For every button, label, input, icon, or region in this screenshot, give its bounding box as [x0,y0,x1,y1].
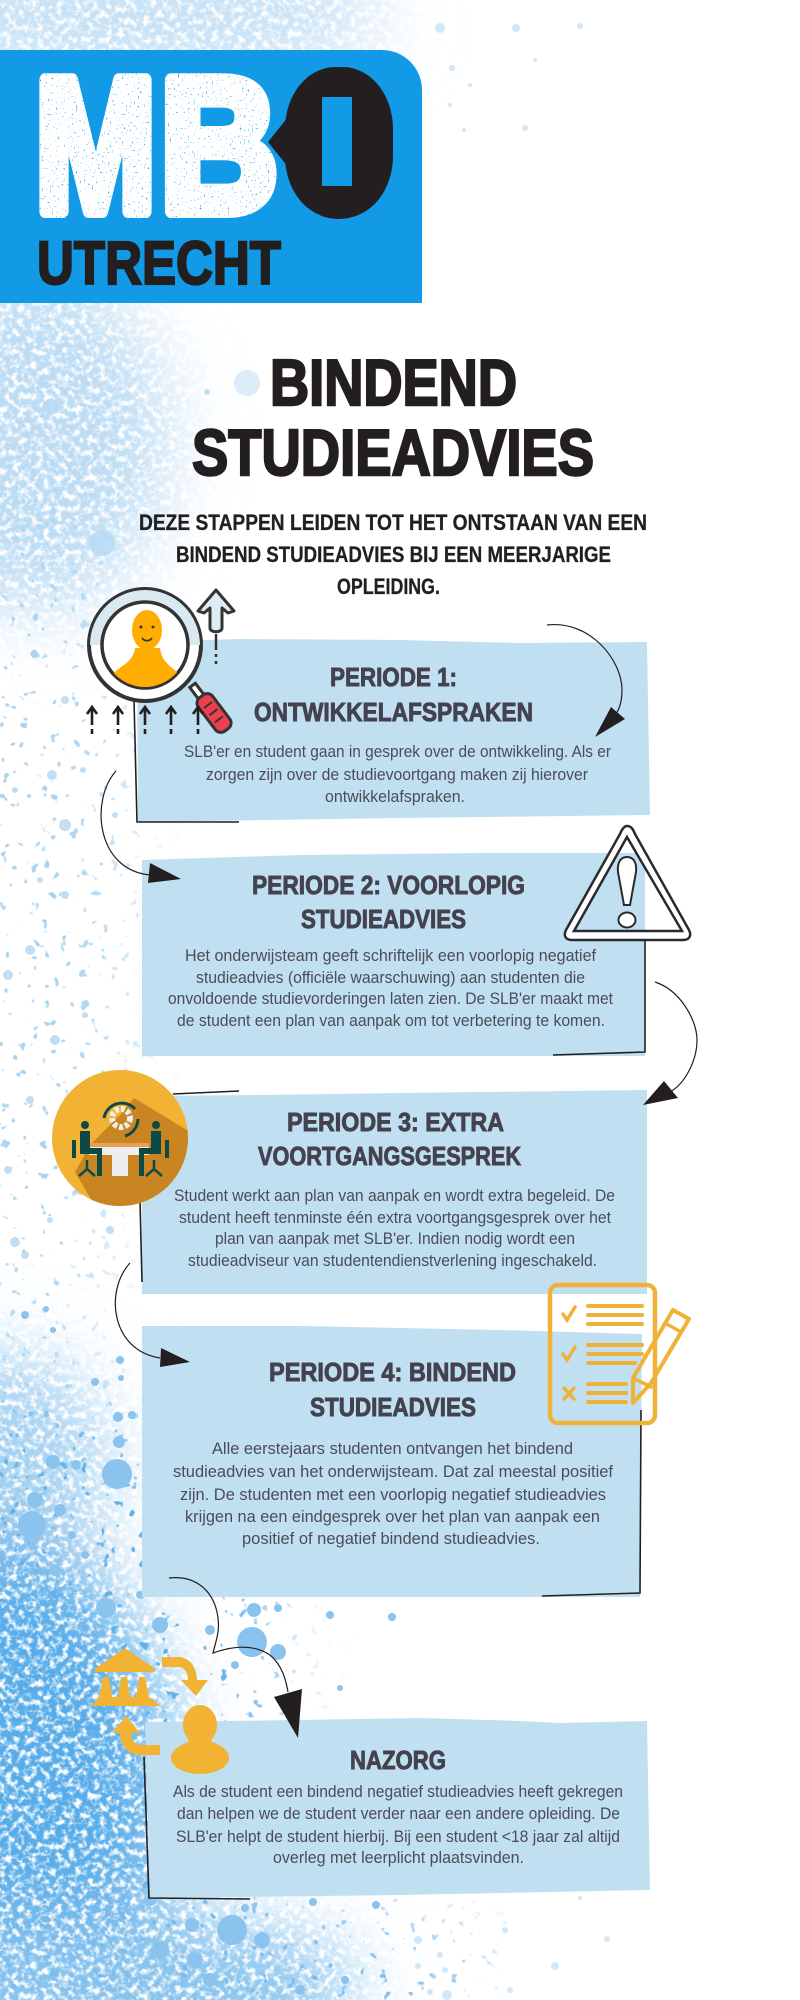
icon: warning triangle [565,826,690,940]
heading: periode 1 [254,662,533,727]
logo word Utrecht: UTRECHT [37,229,281,297]
arrow: to nazorg [169,1578,302,1738]
text: periode 4: zijn. De studenten met een voorlopig negatief studieadvies [180,1485,606,1504]
subtitle [139,510,647,599]
text: nazorg: SLB'er helpt de student hierbij. Bij een student <18 jaar zal altijd [176,1827,620,1846]
text: periode 3 [174,1186,615,1270]
logo: MBO Utrecht [0,33,422,303]
text: periode 1: ontwikkelafspraken. [325,787,465,806]
text: periode 2 [168,946,613,1030]
icon: magnifier with student [87,589,234,735]
text: nazorg [173,1782,623,1867]
panel: periode 3 [140,1090,647,1294]
heading: nazorg: NAZORG [350,1745,446,1775]
heading: periode 4 [269,1357,516,1422]
text: nazorg: overleg met leerplicht plaatsvinden. [273,1848,524,1867]
heading: periode 4: STUDIEADVIES [310,1392,476,1422]
text: periode 4: krijgen na een eindgesprek over het plan van aanpak een [185,1507,600,1526]
arrow: to periode 4 [115,1263,190,1367]
heading: periode 2: PERIODE 2: VOORLOPIG [252,870,525,900]
text: periode 1: SLB'er en student gaan in gesprek over de ontwikkeling. Als er [184,742,611,761]
logo letter B: B [160,40,278,252]
text: periode 2: Het onderwijsteam geeft schriftelijk een voorlopig negatief [185,946,596,965]
title: STUDIEADVIES [192,416,594,489]
title [192,346,594,489]
panel: periode 1 [134,639,650,822]
arrow: to periode 3 [643,982,697,1105]
heading: periode 3: VOORTGANGSGESPREK [258,1141,521,1171]
text: periode 1: zorgen zijn over de studievoortgang maken zij hierover [206,765,588,784]
heading: periode 3 [258,1107,521,1171]
panel: nazorg [144,1718,650,1899]
subtitle: OPLEIDING. [337,574,440,599]
big up arrow [198,590,234,668]
heading: periode 2: STUDIEADVIES [301,904,466,934]
heading: periode 4: PERIODE 4: BINDEND [269,1357,516,1387]
heading: periode 2 [252,870,525,934]
arrow: to periode 2 [101,771,181,883]
text: periode 3: plan van aanpak met SLB'er. Indien nodig wordt een [215,1229,575,1248]
text: nazorg: Als de student een bindend negatief studieadvies heeft gekregen [173,1782,623,1801]
student [183,1705,217,1745]
faint blot left of title [234,370,260,396]
logo letter M: M [35,40,156,252]
heading: periode 1: PERIODE 1: [330,662,457,692]
text: periode 1 [184,742,611,806]
text: periode 3: studieadviseur van studentendienstverlening ingeschakeld. [188,1251,597,1270]
icon: meeting at table [52,1070,188,1206]
text: periode 4: Alle eerstejaars studenten ontvangen het bindend [212,1439,573,1458]
text: periode 2: studieadvies (officiële waarschuwing) aan studenten die [196,968,585,987]
heading: periode 3: PERIODE 3: EXTRA [287,1107,504,1137]
small up arrows [87,707,203,734]
subtitle: DEZE STAPPEN LEIDEN TOT HET ONTSTAAN VAN EEN [139,510,647,535]
icon: institution and student exchange [91,1648,229,1774]
arrow to institution [112,1716,160,1755]
icon: checklist with pencil [550,1285,689,1423]
text: periode 2: onvoldoende studievorderingen laten zien. De SLB'er maakt met [168,989,613,1008]
text: periode 2: de student een plan van aanpak om tot verbetering te komen. [177,1011,605,1030]
institution [95,1648,155,1672]
heading: periode 1: ONTWIKKELAFSPRAKEN [254,697,533,727]
arrow to student [162,1657,208,1696]
text: periode 3: student heeft tenminste één extra voortgangsgesprek over het [179,1208,611,1227]
text: periode 4: studieadvies van het onderwijsteam. Dat zal meestal positief [173,1462,613,1481]
text: periode 3: Student werkt aan plan van aanpak en wordt extra begeleid. De [174,1186,615,1205]
arrow: to periode 1 [547,625,625,737]
text: periode 4 [173,1439,613,1548]
logo letter O: 0 [285,33,393,261]
subtitle: BINDEND STUDIEADVIES BIJ EEN MEERJARIGE [176,542,611,567]
text: periode 4: positief of negatief bindend studieadvies. [242,1529,540,1548]
background: blue paint splatter [0,0,610,2000]
magnifier handle [186,680,234,735]
text: nazorg: dan helpen we de student verder naar een andere opleiding. De [177,1804,620,1823]
title: BINDEND [270,346,517,419]
panel: periode 2 [142,853,645,1056]
panel: periode 4 [142,1326,642,1597]
